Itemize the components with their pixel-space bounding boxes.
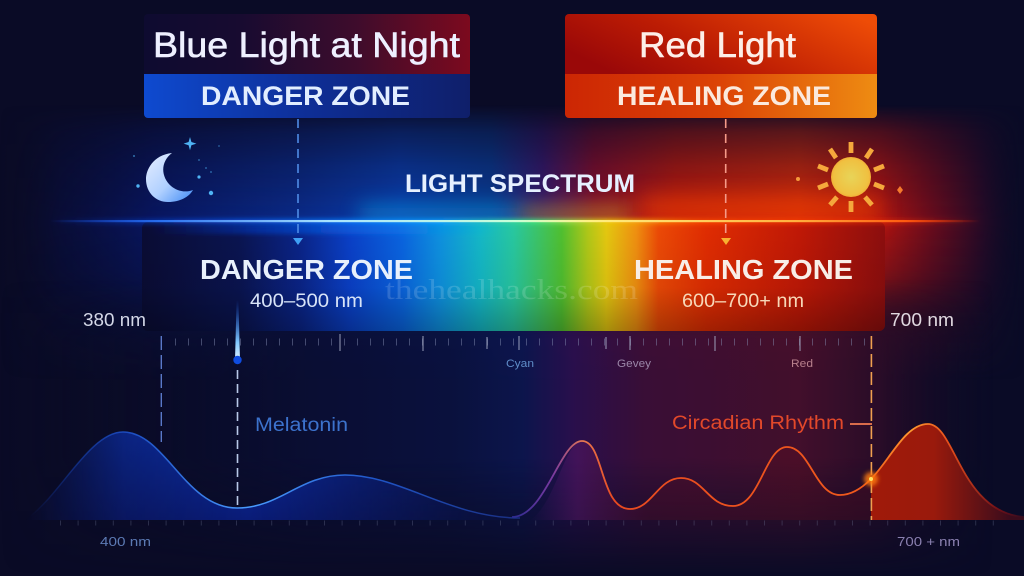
panel: red light healing zone [565,14,877,118]
glow above spectrum [360,195,880,222]
label: healing zone: HEALING ZONE [617,81,831,111]
callout line: circadian [850,423,872,425]
panel: blue light danger zone [144,14,470,118]
icon: moon and stars [133,137,220,202]
label: 700 nm: 700 nm [890,310,954,330]
label: red: Red [791,358,813,370]
label: danger zone band: DANGER ZONE [200,254,413,285]
dashed marker: 700 nm [870,336,872,520]
axis label: 400 nm: 400 nm [100,534,151,549]
label: circadian rhythm: Circadian Rhythm [672,413,844,434]
label: danger zone: DANGER ZONE [201,81,410,111]
crescent moon [146,153,193,202]
label: cyan: Cyan [506,358,534,370]
dashed marker: melatonin [236,370,238,508]
sun rays [818,142,884,212]
spectrum band [142,222,885,331]
melatonin area fill [39,432,485,520]
top ruler ticks [175,334,870,351]
curve intersection glow [864,472,878,486]
sun disc [831,157,871,197]
melatonin curve [25,432,520,520]
text: 600-700+ nm: 600–700+ nm [682,291,804,312]
text: 400-500 nm: 400–500 nm [250,291,363,312]
dashed marker: 380 nm [160,336,162,442]
melatonin line [30,432,520,518]
bottom ruler ticks [60,520,1000,526]
arrow: healing zone pointer [721,119,731,245]
label: melatonin: Melatonin [255,415,348,436]
label: gevey: Gevey [617,358,652,370]
label: 380 nm: 380 nm [83,310,146,330]
background [36,108,1003,558]
heading: blue light at night: Blue Light at Night [153,26,460,65]
circadian low glow [530,441,871,520]
red panel top [565,14,877,74]
watermark: thehealhacks.com [385,274,639,306]
spectrum labels [506,358,813,370]
icon: sun [796,142,903,212]
blue panel bottom [144,74,470,118]
circadian area fill [871,424,1024,520]
melatonin spike marker [233,300,242,364]
blue panel top [144,14,470,74]
heading: red light: Red Light [639,26,796,65]
circadian line [512,424,1024,517]
label: healing zone band: HEALING ZONE [634,254,853,285]
circadian rhythm curve [512,424,1024,520]
title: light spectrum: LIGHT SPECTRUM [405,170,635,198]
horizon light line [50,219,980,224]
arrow: danger zone pointer [293,119,303,245]
stars [133,137,220,195]
axis label: 700+ nm: 700 + nm [897,534,960,549]
red panel bottom [565,74,877,118]
